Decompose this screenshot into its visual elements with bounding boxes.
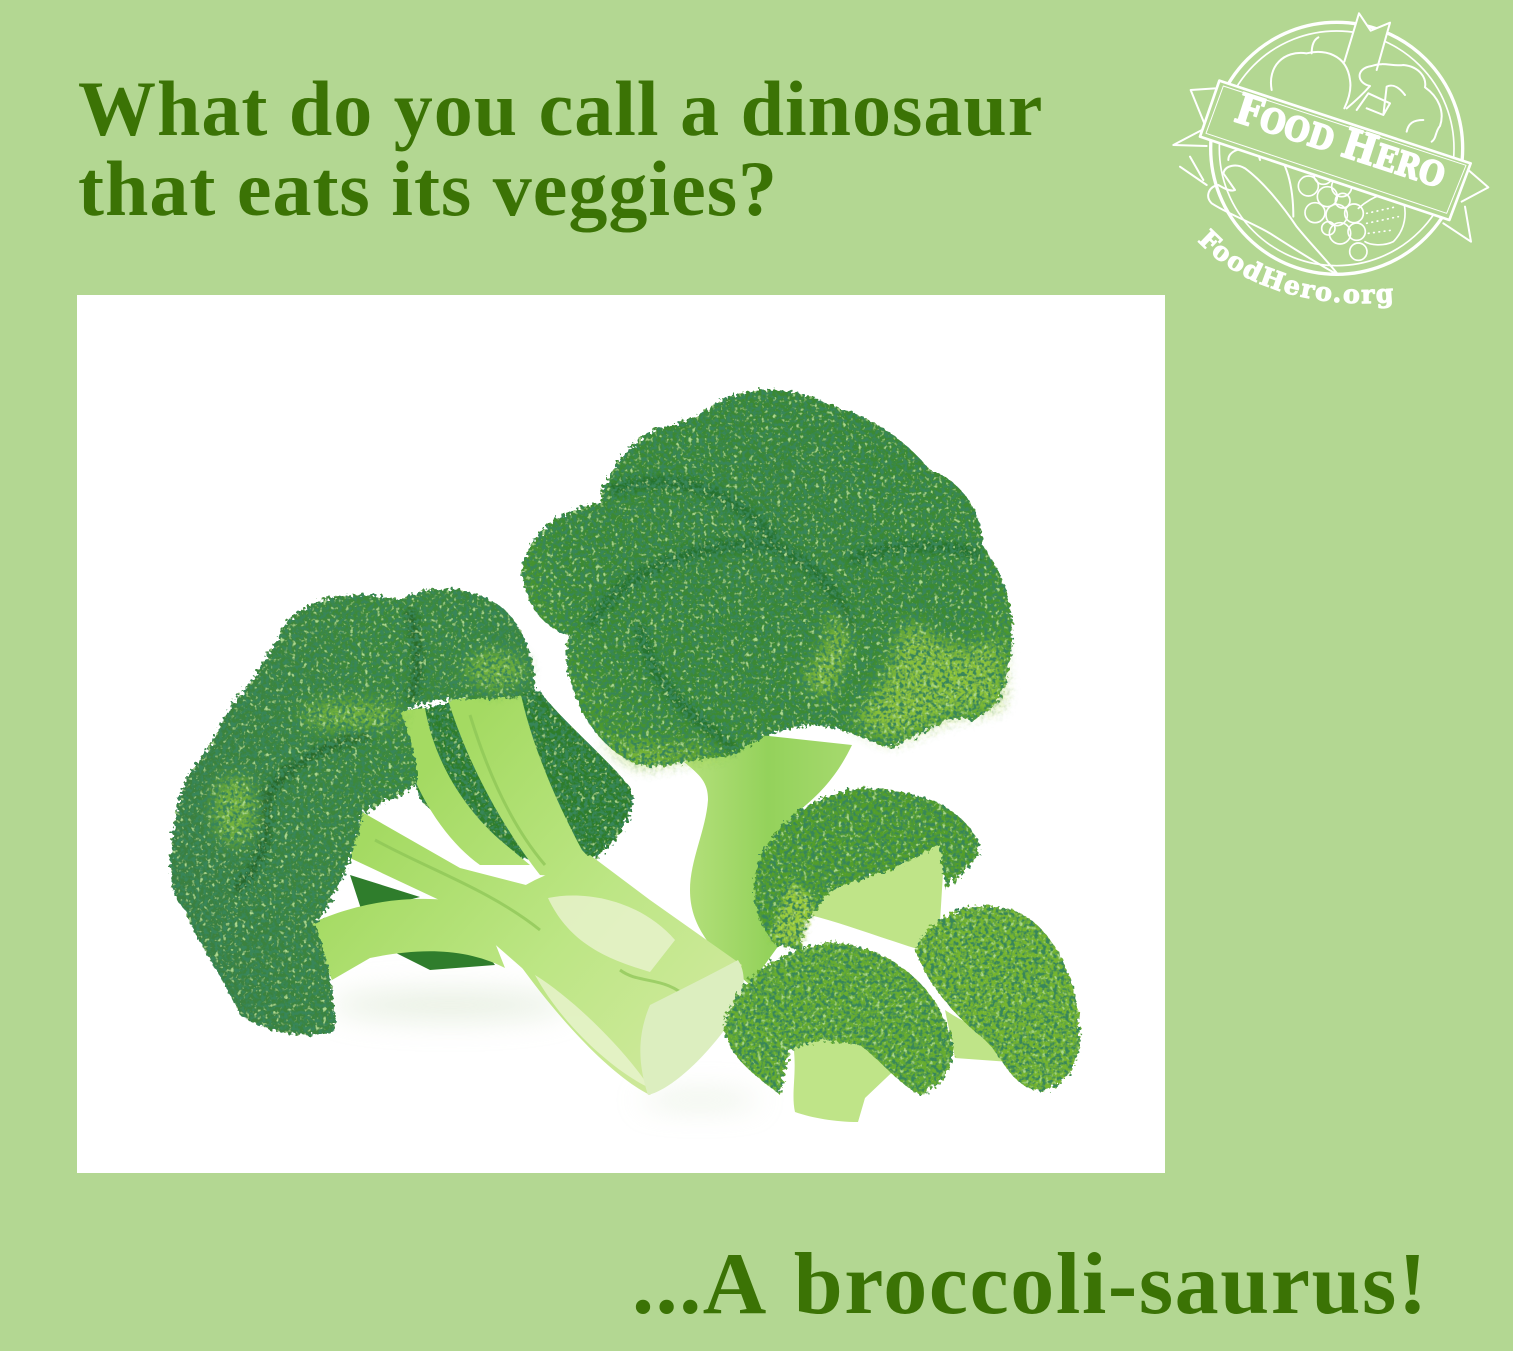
back florets (395, 690, 632, 862)
front small floret (724, 942, 953, 1095)
cut stem end (640, 960, 744, 1095)
title: joke question (78, 65, 1043, 232)
apple outline (1271, 37, 1350, 108)
yellow-green crown highlights (600, 600, 1000, 765)
rear small floret (754, 788, 980, 950)
title: joke question: that eats its veggies? (78, 145, 778, 232)
trunk plates (535, 895, 675, 1088)
upright crown (522, 390, 1012, 766)
strawberry outline (1358, 193, 1405, 245)
large upright broccoli head (522, 390, 1012, 985)
logo: Food Hero badge (1172, 12, 1490, 309)
white photo background (77, 295, 1165, 1173)
small florets, lower right (724, 788, 1080, 1122)
branches and trunk (308, 690, 742, 1095)
branch ridges (375, 715, 690, 1000)
carrot outline (1180, 148, 1338, 275)
ribbon inner line (1206, 86, 1466, 213)
crown lime highlights (213, 652, 525, 845)
logo url on curve: FoodHero.org (1198, 228, 1393, 309)
ribbon banner (1200, 81, 1471, 220)
fallen broccoli, left (170, 589, 744, 1095)
logo wordmark: FOOD HERO (1230, 84, 1452, 198)
title: joke question: What do you call a dinosaur (78, 65, 1043, 152)
punchline: ...A broccoli-saurus! (632, 1236, 1429, 1333)
photo panel: broccoli on white (77, 295, 1165, 1173)
side ribbon tails (1173, 88, 1488, 242)
floret stems (790, 840, 1020, 1122)
broccoli outline (1347, 64, 1442, 142)
top ribbon tail (1344, 13, 1390, 70)
upright stem (684, 735, 852, 985)
badge circle rings (1211, 22, 1463, 274)
dark floret under trunk (350, 875, 495, 970)
left crown (170, 589, 535, 1035)
crown shading folds (590, 482, 980, 750)
soft shadow under broccoli (330, 989, 760, 1108)
crown fold shading (235, 610, 418, 890)
grapes outline (1298, 166, 1367, 260)
lime edge of rear floret (770, 880, 815, 945)
right small floret (915, 906, 1080, 1092)
